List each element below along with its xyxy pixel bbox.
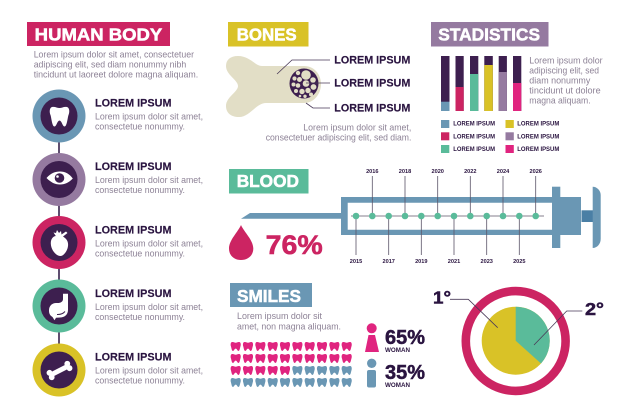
icon: blood drop — [229, 225, 253, 260]
panel: bones — [226, 22, 411, 143]
text block: statistics: Lorem ipsum dolor — [529, 54, 603, 65]
callout lines — [277, 60, 330, 108]
heading: human body: HUMAN BODY — [35, 25, 162, 45]
pie chart — [482, 307, 550, 375]
item text: bone — [95, 352, 203, 386]
text block: smiles: Lorem ipsum dolor sit — [237, 310, 322, 321]
item text: bone: Lorem ipsum dolor sit amet, — [95, 365, 203, 376]
text block: intro: adipiscing elit, sed diam nonummy nibh — [34, 58, 186, 69]
timeline: 2016 — [366, 169, 379, 175]
icon: woman blue — [367, 359, 376, 388]
item text: stomach: Lorem ipsum dolor sit amet, — [95, 301, 203, 312]
timeline: 2025 — [513, 259, 526, 265]
timeline: 2026 — [529, 169, 542, 175]
panel: smiles — [230, 283, 425, 389]
heading: stadistics: STADISTICS — [438, 25, 540, 45]
item text: heart: Lorem ipsum dolor sit amet, — [95, 237, 203, 248]
icon: eye — [32, 153, 86, 206]
item text: heart: LOREM IPSUM — [95, 224, 172, 236]
timeline: 2018 — [399, 169, 411, 175]
legend: LOREM IPSUM — [517, 122, 559, 128]
stat: 76%: 76% — [266, 230, 323, 260]
timeline: 2017 — [382, 259, 395, 265]
panel: blood — [229, 169, 601, 265]
item text: tooth: consectetue nonummy. — [95, 120, 185, 131]
legend — [441, 120, 559, 153]
icon: stomach — [32, 280, 86, 332]
text block: bones: Lorem ipsum dolor sit amet, — [303, 122, 411, 133]
item text: eye: LOREM IPSUM — [95, 161, 172, 173]
icon: woman magenta — [365, 323, 379, 352]
callout 2: 2° — [585, 299, 604, 319]
timeline: 2015 — [350, 259, 362, 265]
text block: bones — [266, 122, 411, 143]
bone illustration — [226, 56, 321, 117]
timeline: 2022 — [464, 169, 477, 175]
item text: bone: LOREM IPSUM — [95, 352, 172, 364]
item text: tooth: Lorem ipsum dolor sit amet, — [95, 110, 203, 121]
timeline — [350, 169, 544, 265]
item text: eye — [95, 161, 203, 195]
timeline: 2019 — [415, 259, 428, 265]
text block: statistics: magna aliquam. — [529, 94, 591, 105]
item text: stomach: LOREM IPSUM — [95, 288, 172, 300]
item text: bone: consectetue nonummy. — [95, 375, 185, 386]
timeline: 2023 — [480, 259, 493, 265]
text block: statistics: diam nonummy — [529, 74, 591, 85]
timeline: 2020 — [431, 169, 444, 175]
stat: 35% woman: WOMAN — [385, 383, 410, 389]
icon: heart — [32, 216, 86, 269]
callout labels: LOREM IPSUM — [334, 54, 410, 66]
panel: statistics — [431, 22, 603, 153]
timeline: 2024 — [497, 169, 510, 175]
ring — [466, 291, 566, 391]
callout 1 — [433, 287, 498, 328]
callout 1: 1° — [433, 287, 451, 307]
heading: smiles: SMILES — [237, 286, 301, 306]
item text: tooth: LOREM IPSUM — [95, 97, 172, 109]
icon: bone — [32, 344, 86, 396]
heading: bones — [228, 22, 308, 46]
item text: heart — [95, 224, 203, 258]
text block: bones: consectetuer adipiscing elit, sed diam. — [266, 132, 411, 143]
heading: bones: BONES — [237, 25, 297, 45]
item text: stomach — [95, 288, 203, 322]
callout labels: LOREM IPSUM — [334, 102, 410, 114]
callout labels — [334, 54, 410, 114]
text block: statistics: tincidunt ut dolore — [529, 84, 601, 95]
legend: LOREM IPSUM — [453, 134, 495, 140]
icon: tooth — [32, 90, 86, 142]
syringe — [241, 187, 601, 248]
legend: LOREM IPSUM — [517, 134, 559, 140]
item text: tooth — [95, 97, 203, 131]
item text: stomach: consectetue nonummy. — [95, 311, 185, 322]
item text: eye: Lorem ipsum dolor sit amet, — [95, 174, 203, 185]
tooth pictogram chart — [231, 342, 352, 387]
stat: 35% woman: 35% — [385, 362, 425, 384]
panel: pie chart — [433, 287, 604, 391]
text block: statistics: adipiscing elit, sed — [529, 64, 599, 75]
heading: blood — [229, 169, 308, 194]
heading: smiles — [230, 283, 312, 307]
stat: 65% woman: WOMAN — [385, 348, 410, 354]
connector line — [58, 130, 60, 360]
text block: intro: tincidunt ut laoreet dolore magna aliquam. — [34, 68, 198, 79]
legend: LOREM IPSUM — [453, 147, 495, 153]
text block: statistics — [529, 54, 603, 105]
stat: 65% woman: 65% — [385, 327, 425, 349]
timeline: 2021 — [448, 259, 460, 265]
callout 2 — [534, 299, 604, 345]
text block: intro — [34, 48, 198, 79]
legend: LOREM IPSUM — [453, 122, 495, 128]
bar chart — [441, 56, 521, 111]
text block: intro: Lorem ipsum dolor sit amet, consectetuer — [34, 48, 194, 59]
item text: eye: consectetue nonummy. — [95, 184, 185, 195]
legend: LOREM IPSUM — [517, 147, 559, 153]
heading: blood: BLOOD — [237, 171, 299, 191]
text block: smiles: amet, non magna aliquam. — [237, 320, 341, 332]
text block: smiles — [237, 310, 341, 332]
panel: human body — [27, 22, 203, 396]
callout labels: LOREM IPSUM — [334, 78, 410, 90]
item text: heart: consectetue nonummy. — [95, 247, 185, 258]
